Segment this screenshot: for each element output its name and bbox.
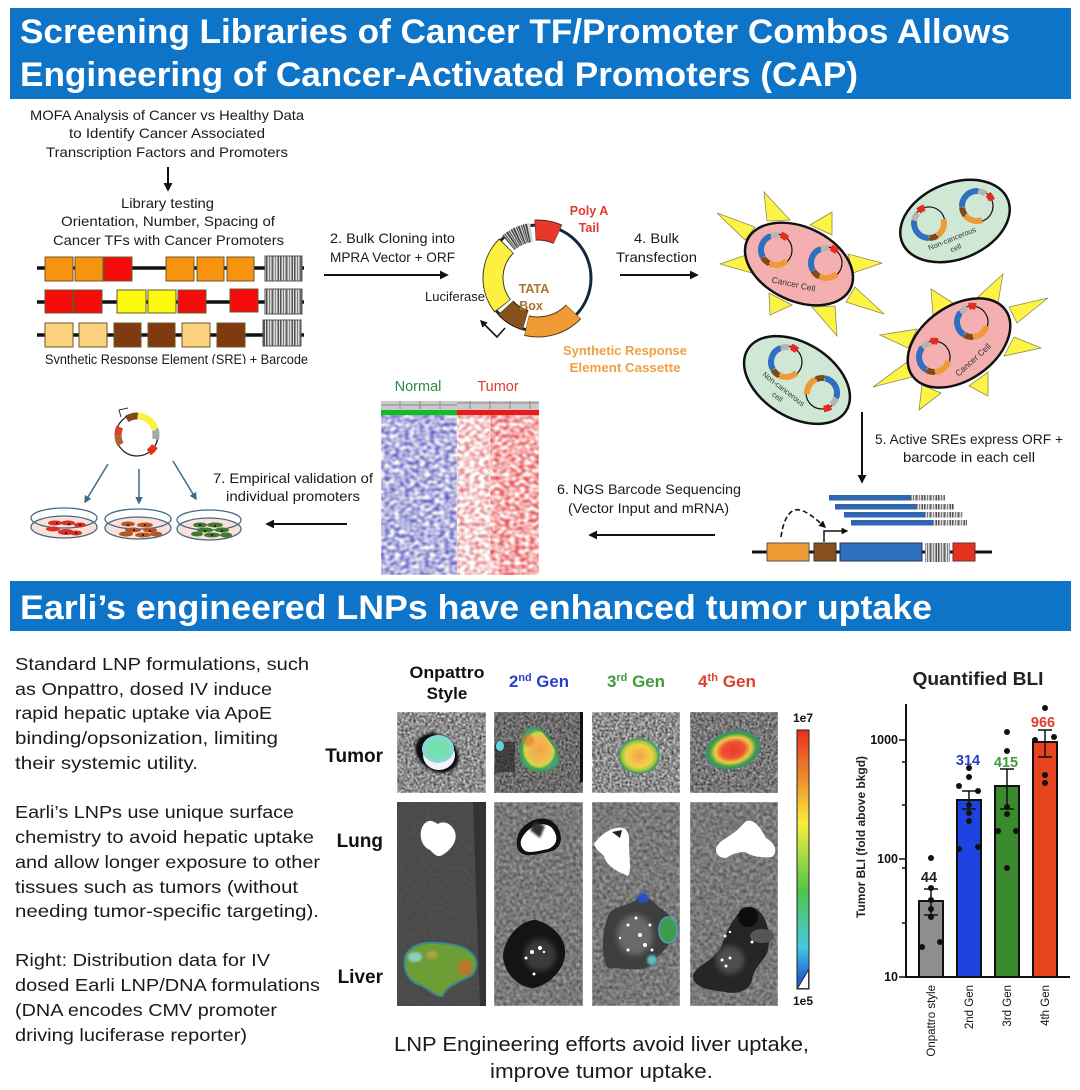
step 6 label: 6. NGS Barcode Sequencing — [557, 481, 741, 497]
error bars — [924, 730, 1052, 915]
title banner: Engineering of Cancer-Activated Promoters (CAP) — [20, 56, 858, 94]
arrow: step 6 — [590, 534, 715, 536]
bar: 2nd Gen — [957, 800, 981, 977]
description text: as Onpattro, dosed IV induce — [15, 679, 272, 699]
organ image: 3rd gen lung and liver — [592, 802, 680, 1006]
heatmap: Normal — [395, 379, 441, 395]
column headers: Onpattro — [410, 663, 484, 682]
chart title: Quantified BLI — [912, 669, 1044, 689]
colour scale bar: 1e5 — [793, 994, 813, 1008]
description text: dosed Earli LNP/DNA formulations — [15, 975, 320, 995]
step 1: MOFA analysis text: Transcription Factors and Promoters — [46, 144, 288, 160]
library testing text — [53, 195, 284, 248]
arrow: step 7 — [267, 523, 347, 525]
step 5 label: barcode in each cell — [903, 449, 1035, 465]
non-cancerous cell lower left: cell — [770, 390, 785, 404]
caption under images: improve tumor uptake. — [490, 1061, 713, 1083]
description text: needing tumor-specific targeting). — [15, 901, 319, 921]
description text: Right: Distribution data for IV — [15, 950, 270, 970]
cancer cell lower right — [873, 274, 1048, 410]
tumor image: 2nd gen — [494, 712, 583, 793]
step 1: MOFA analysis text: MOFA Analysis of Cancer vs Healthy Data — [30, 107, 304, 123]
description text — [15, 654, 320, 1045]
y axis title: Tumor BLI (fold above bkgd) — [854, 756, 868, 918]
description text: Standard LNP formulations, such — [15, 654, 309, 674]
bar: Onpattro style — [919, 901, 943, 977]
plasmid labels — [425, 204, 687, 375]
colour scale bar — [793, 711, 813, 1008]
SRE caption: Synthetic Response Element (SRE) + Barcode — [45, 352, 308, 367]
cancer cell top left: Cancer Cell — [771, 275, 816, 294]
value labels: 44 — [921, 870, 937, 886]
column headers: nd — [518, 672, 532, 684]
bar: 4th Gen — [1033, 742, 1057, 977]
organ image: 2nd gen lung and liver — [494, 802, 583, 1006]
y axis ticks and labels: 100 — [877, 852, 898, 866]
step 6 label — [557, 481, 741, 516]
axes — [906, 704, 1070, 977]
tumor image: Onpattro — [397, 712, 486, 793]
description text: their systemic utility. — [15, 753, 198, 773]
value labels — [921, 715, 1055, 886]
validation plasmid — [108, 406, 166, 464]
column headers: Gen — [718, 672, 756, 691]
x axis labels: 4th Gen — [1040, 985, 1052, 1026]
organ image: Onpattro lung and liver — [397, 802, 486, 1006]
step 2 label: MPRA Vector + ORF — [330, 249, 455, 265]
cancer cell lower right: Cancer Cell — [953, 341, 993, 378]
plasmid labels: Box — [519, 299, 543, 313]
row labels: Lung — [337, 831, 383, 852]
step 4 label: 4. Bulk — [634, 230, 680, 246]
value labels: 415 — [994, 755, 1018, 771]
x axis labels: 2nd Gen — [964, 985, 976, 1029]
tumor image: 3rd gen — [592, 712, 680, 793]
description text: chemistry to avoid hepatic uptake — [15, 827, 314, 847]
expression construct — [752, 510, 992, 562]
section banner: LNPs: Earli’s engineered LNPs have enhanced tumor uptake — [20, 589, 932, 627]
step 1: MOFA analysis text — [30, 107, 304, 160]
column headers: Gen — [627, 672, 665, 691]
step 5 label: 5. Active SREs express ORF + — [875, 431, 1063, 447]
plasmid labels: TATA — [519, 282, 549, 296]
column headers: rd — [616, 672, 627, 684]
synthetic response element rows — [37, 256, 304, 347]
value labels: 314 — [956, 753, 980, 769]
tumor image: 4th gen — [690, 712, 778, 793]
description text: rapid hepatic uptake via ApoE — [15, 703, 272, 723]
bar: 3rd Gen — [995, 786, 1019, 977]
library testing text: Orientation, Number, Spacing of — [61, 213, 275, 229]
plasmid labels: Luciferase — [425, 290, 485, 304]
step 7 label: individual promoters — [226, 488, 360, 504]
column headers: 2 — [509, 672, 518, 691]
non-cancerous cell top right: cell — [949, 242, 963, 254]
plasmid labels: Element Cassette — [570, 361, 681, 375]
step 7 label: 7. Empirical validation of — [213, 470, 373, 486]
title banner: Screening Libraries of Cancer TF/Promoter Combos Allows — [20, 13, 1010, 51]
plasmid labels: Poly A — [570, 204, 608, 218]
arrow: step 4 — [620, 274, 697, 276]
caption under images — [394, 1034, 809, 1083]
x axis labels: Onpattro style — [926, 985, 938, 1057]
non-cancerous cell top right — [888, 164, 1022, 278]
cancer cell top left — [717, 192, 884, 336]
column headers: 4 — [698, 672, 707, 691]
colour scale bar: 1e7 — [793, 711, 813, 725]
y axis ticks and labels: 10 — [884, 970, 898, 984]
bar chart: quantified BLI — [854, 669, 1070, 1057]
step 5 label — [875, 431, 1063, 465]
description text: driving luciferase reporter) — [15, 1025, 247, 1045]
row labels: Tumor — [325, 746, 384, 767]
column headers: Gen — [532, 672, 569, 691]
plasmid labels: Synthetic Response — [563, 344, 687, 358]
organ image: 4th gen lung and liver — [690, 802, 778, 1006]
sequencing reads — [829, 495, 967, 526]
column headers: th — [708, 672, 718, 684]
arrow: MOFA to library — [167, 167, 169, 190]
row labels — [325, 746, 384, 988]
step 7 label — [213, 470, 373, 504]
y axis ticks and labels: 1000 — [870, 733, 898, 747]
column headers — [410, 663, 756, 703]
value labels: 966 — [1031, 715, 1055, 731]
non-cancerous cell top right: Non-cancerous — [927, 225, 978, 252]
x axis labels: 3rd Gen — [1002, 985, 1014, 1027]
non-cancerous cell lower left: Non-cancerous — [761, 370, 807, 408]
library testing text: Cancer TFs with Cancer Promoters — [53, 232, 284, 248]
arrow: step 2 — [324, 274, 447, 276]
description text: (DNA encodes CMV promoter — [15, 1000, 277, 1020]
column headers: Style — [427, 684, 467, 703]
description text: binding/opsonization, limiting — [15, 728, 278, 748]
y axis ticks and labels — [870, 733, 906, 984]
description text: tissues such as tumors (without — [15, 877, 298, 897]
heatmap: Tumor — [477, 379, 519, 395]
step 4 label — [616, 230, 697, 265]
culture dish: brown cells — [105, 509, 171, 539]
caption under images: LNP Engineering efforts avoid liver uptake, — [394, 1034, 809, 1056]
column headers: 3 — [607, 672, 616, 691]
x axis labels — [926, 985, 1052, 1057]
step 2 label: 2. Bulk Cloning into — [330, 230, 455, 246]
non-cancerous cell lower left — [728, 318, 866, 442]
plasmid vector — [469, 209, 607, 347]
step 4 label: Transfection — [616, 249, 697, 265]
step 6 label: (Vector Input and mRNA) — [568, 500, 729, 516]
section banner: LNPs — [10, 581, 1071, 631]
library testing text: Library testing — [121, 195, 214, 211]
arrow: step 5 — [861, 412, 863, 482]
data points — [919, 705, 1057, 950]
arrows to dishes — [85, 461, 196, 503]
heatmap — [381, 379, 539, 575]
plasmid labels: Tail — [579, 221, 599, 235]
description text: and allow longer exposure to other — [15, 852, 320, 872]
culture dish: red cells — [31, 508, 97, 538]
step 1: MOFA analysis text: to Identify Cancer Associated — [69, 125, 265, 141]
description text: Earli’s LNPs use unique surface — [15, 802, 294, 822]
title banner — [10, 8, 1071, 99]
row labels: Liver — [338, 967, 384, 988]
culture dish: green cells — [177, 510, 241, 540]
step 2 label — [330, 230, 455, 265]
